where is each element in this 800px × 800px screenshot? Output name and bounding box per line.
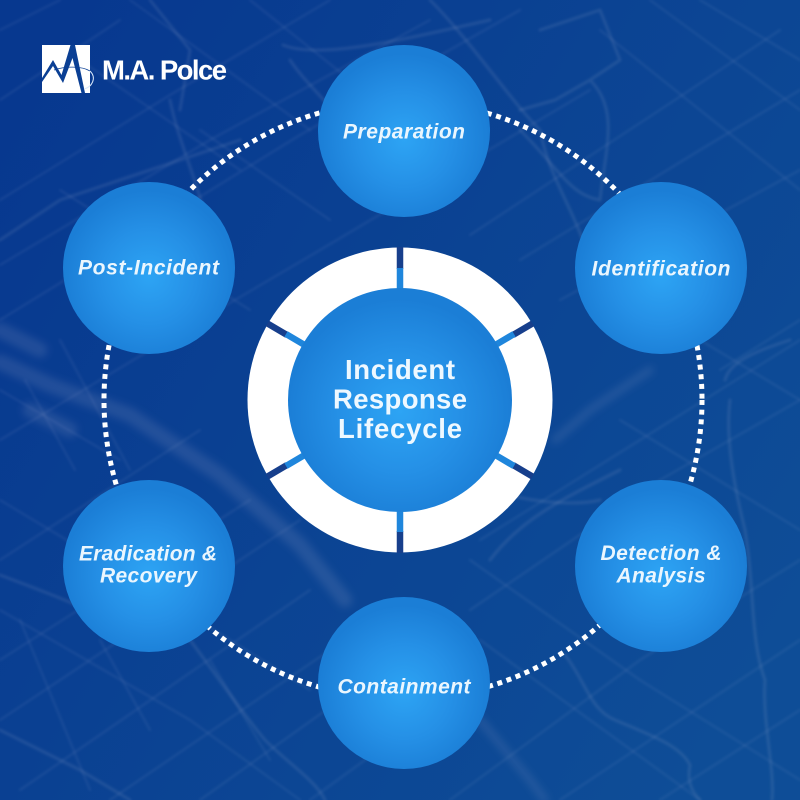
node: Post-Incident: [63, 182, 235, 354]
central circle: title: [288, 288, 512, 512]
title: Lifecycle: [338, 413, 462, 444]
node: Detection & Analysis: Analysis: [616, 564, 706, 588]
node: Eradication & Recovery: Eradication &: [79, 542, 217, 566]
title: Incident: [345, 354, 455, 385]
title: Response: [333, 384, 467, 414]
segment gaps: [268, 247, 532, 553]
node: Identification: Identification: [592, 258, 730, 280]
icon: logo mark: [42, 45, 93, 93]
node: Containment: Containment: [338, 676, 472, 698]
logo: M.A. Polce: [42, 45, 227, 93]
logo wordmark: M.A. Polce: [102, 54, 227, 86]
node: Preparation: [318, 45, 490, 217]
central ring: six white segments: [248, 247, 552, 553]
node: Post-Incident: Post-Incident: [78, 256, 220, 280]
node: Identification: [575, 182, 747, 354]
node: Eradication & Recovery: [63, 480, 235, 652]
dotted connecting ring: [104, 101, 702, 699]
node: Containment: [318, 597, 490, 769]
node: Detection & Analysis: [575, 480, 747, 652]
node: Eradication & Recovery: Recovery: [100, 564, 198, 588]
node: Preparation: Preparation: [343, 120, 465, 144]
node: Detection & Analysis: Detection &: [600, 542, 722, 565]
